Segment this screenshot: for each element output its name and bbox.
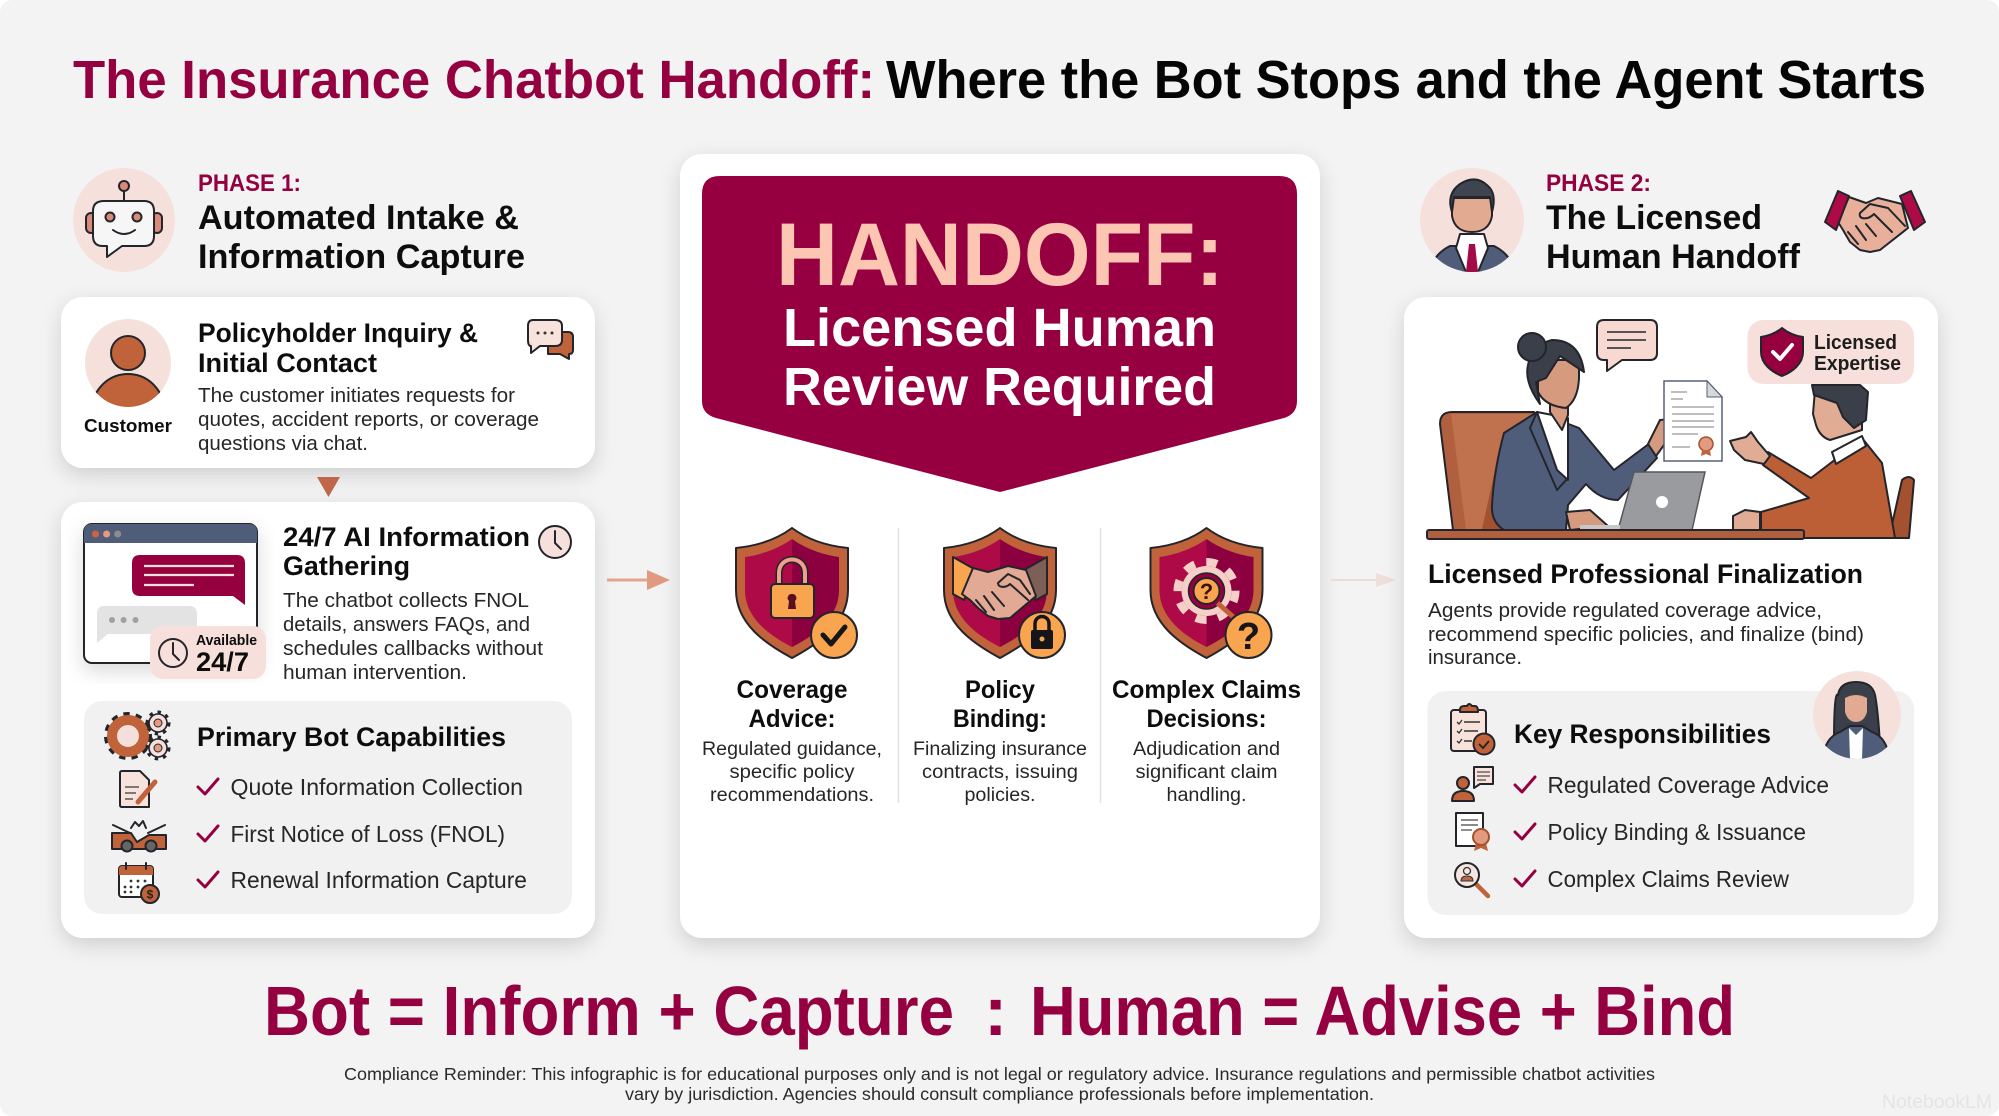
illustration: agent meeting (1427, 320, 1914, 539)
description: insurance. (1428, 647, 1522, 669)
panel: licensed professional (1404, 297, 1938, 938)
panel: primary bot capabilities (84, 701, 572, 914)
icon: document (120, 771, 155, 807)
heading (198, 318, 478, 378)
description: questions via chat. (198, 433, 368, 455)
binding text: policies. (964, 785, 1036, 806)
compliance note: vary by jurisdiction. Agencies should consult compliance professionals before implementation. (625, 1084, 1374, 1104)
column: policy binding (913, 528, 1087, 806)
icon: calendar: $ (147, 888, 154, 902)
watermark: NotebookLM (1882, 1092, 1992, 1113)
icon: shield handshake (944, 528, 1065, 658)
coverage text: Regulated guidance, (702, 739, 882, 760)
capabilities heading: Primary Bot Capabilities (197, 722, 506, 752)
summary equation: : (984, 972, 1007, 1050)
binding text: Finalizing insurance (913, 739, 1087, 760)
coverage heading (736, 676, 848, 733)
badge: licensed expertise: Expertise (1814, 353, 1901, 375)
arrow: down (317, 477, 340, 497)
heading: Gathering (283, 551, 410, 581)
column: coverage advice (702, 528, 882, 806)
claims text: handling. (1166, 785, 1246, 806)
banner: Licensed Human (783, 298, 1216, 358)
badge: licensed expertise: Licensed (1814, 332, 1897, 354)
description (198, 385, 539, 455)
banner (702, 176, 1297, 492)
speech bubble (1597, 320, 1657, 371)
banner: HANDOFF: (776, 204, 1224, 304)
summary equation: Bot = Inform + Capture (264, 972, 954, 1050)
panel: policyholder inquiry (61, 297, 595, 468)
icon: handshake (1825, 191, 1925, 252)
heading: Initial Contact (198, 348, 377, 378)
icon: advisor speech (1452, 767, 1493, 801)
icon: shield gear: ? (1237, 616, 1260, 658)
summary equation (264, 972, 1735, 1050)
customer label: Customer (84, 416, 172, 436)
icon: robot (73, 168, 175, 272)
icon: shield gear: ? (1200, 579, 1213, 604)
title: The Insurance Chatbot Handoff: (73, 50, 875, 110)
description: The chatbot collects FNOL (283, 590, 529, 612)
phase 2 heading (1546, 199, 1801, 276)
list item: First Notice of Loss (FNOL) (230, 821, 505, 847)
panel: key responsibilities (1428, 671, 1914, 915)
heading: 24/7 AI Information (283, 522, 530, 552)
description: details, answers FAQs, and (283, 614, 530, 636)
description: The customer initiates requests for (198, 385, 515, 407)
badge: available 24/7 (150, 626, 266, 679)
client man (1730, 385, 1914, 538)
panel: phase 2 header (1420, 168, 1925, 276)
claims heading: Complex Claims (1112, 676, 1301, 704)
arrow: to phase 2 (1331, 573, 1396, 587)
icon: calendar (119, 863, 159, 903)
banner: Review Required (783, 357, 1216, 417)
claims heading: Decisions: (1146, 705, 1266, 733)
claims text (1133, 739, 1280, 806)
list item: Complex Claims Review (1548, 866, 1789, 892)
compliance note (344, 1064, 1655, 1104)
list item: Renewal Information Capture (230, 867, 527, 893)
desk (1427, 530, 1804, 539)
phase 1 heading: Information Capture (198, 238, 525, 276)
icon: gears (107, 712, 169, 759)
panel: 24/7 gathering and capabilities (61, 502, 595, 938)
description: Agents provide regulated coverage advice, (1428, 600, 1822, 622)
phase 2 heading: The Licensed (1546, 199, 1762, 237)
icon: shield gear (1150, 528, 1272, 658)
binding heading: Binding: (953, 705, 1047, 733)
agent woman (1492, 333, 1672, 530)
claims heading (1112, 676, 1301, 733)
icon: agent avatar (1420, 168, 1524, 272)
icon: magnifier (1455, 863, 1488, 896)
coverage heading: Advice: (748, 705, 836, 733)
badge: available 24/7: Available (196, 632, 257, 649)
binding text (913, 739, 1087, 806)
heading: Key Responsibilities (1514, 719, 1771, 749)
phase 1 heading: Automated Intake & (198, 199, 519, 237)
description (283, 590, 543, 684)
icon: car collision (112, 821, 166, 852)
description: quotes, accident reports, or coverage (198, 409, 539, 431)
phase 1 label: PHASE 1: (198, 170, 301, 197)
phase 1 heading (198, 199, 525, 276)
phase 2 label: PHASE 2: (1546, 170, 1651, 197)
icon: clock (539, 526, 571, 558)
heading: Licensed Professional Finalization (1428, 559, 1863, 589)
arrow: to handoff (607, 570, 670, 590)
title (73, 50, 1926, 110)
compliance note: Compliance Reminder: This infographic is for educational purposes only and is not legal or regulatory advice. Insurance regulations and permissible chatbot activities (344, 1064, 1655, 1084)
description: recommend specific policies, and finalize (bind) (1428, 624, 1864, 646)
icon: chat bubbles (528, 320, 573, 359)
icon: shield lock (736, 528, 857, 658)
column: complex claims (1112, 528, 1301, 806)
description (1428, 600, 1864, 669)
document (1664, 381, 1722, 461)
badge: available 24/7: 24/7 (196, 647, 249, 677)
coverage heading: Coverage (736, 676, 848, 704)
binding text: contracts, issuing (922, 762, 1078, 783)
laptop (1580, 472, 1705, 530)
binding heading (953, 676, 1047, 733)
title: Where the Bot Stops and the Agent Starts (886, 50, 1926, 110)
claims text: Adjudication and (1133, 739, 1280, 760)
icon: certificate (1456, 813, 1489, 851)
chair (1440, 412, 1534, 530)
binding heading: Policy (965, 676, 1035, 704)
phase 2 heading: Human Handoff (1546, 238, 1801, 276)
claims text: significant claim (1136, 762, 1278, 783)
list item: Quote Information Collection (230, 774, 523, 800)
description: human intervention. (283, 662, 467, 684)
coverage text: specific policy (730, 762, 855, 783)
icon: female agent avatar (1813, 671, 1901, 760)
coverage text (702, 739, 882, 806)
list item: Policy Binding & Issuance (1548, 819, 1806, 845)
heading (283, 522, 530, 581)
badge: licensed expertise (1748, 320, 1914, 384)
panel: handoff (680, 154, 1320, 938)
icon: customer (85, 319, 171, 407)
heading: Policyholder Inquiry & (198, 318, 478, 348)
icon: clipboard (1451, 704, 1494, 754)
description: schedules callbacks without (283, 638, 543, 660)
summary equation: Human = Advise + Bind (1030, 972, 1735, 1050)
icon: chat window (84, 524, 257, 663)
list item: Regulated Coverage Advice (1548, 772, 1829, 798)
coverage text: recommendations. (710, 785, 874, 806)
panel: phase 1 header (73, 168, 525, 276)
